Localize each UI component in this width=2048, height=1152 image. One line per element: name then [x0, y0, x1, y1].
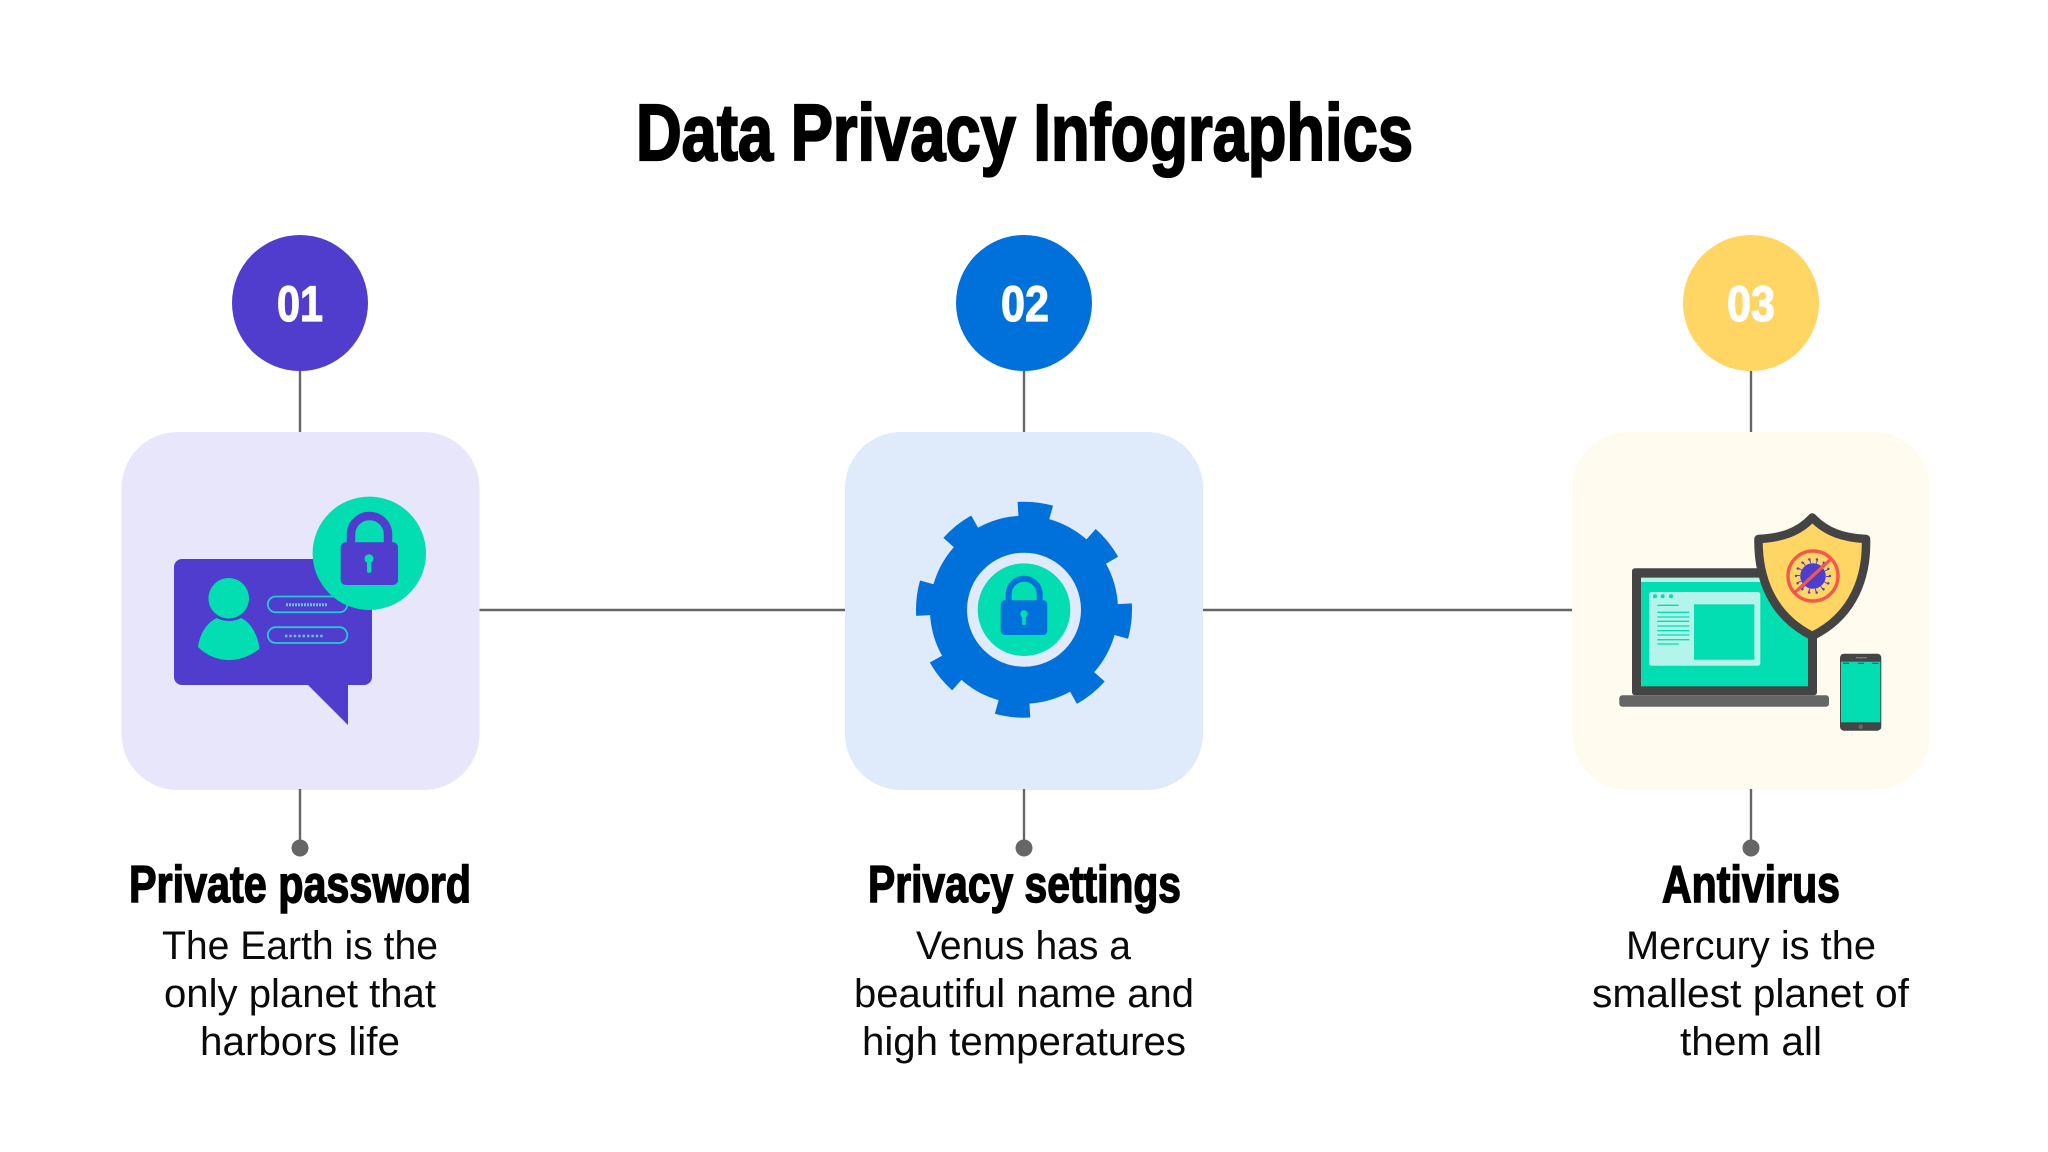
description 02: beautiful name and: [854, 972, 1194, 1016]
icon: profile speech bubble with padlock: [174, 497, 426, 725]
panel: privacy settings: [845, 235, 1203, 1064]
panel: antivirus: [1572, 235, 1930, 1064]
description 03: [1592, 924, 1910, 1064]
title: Data Privacy Infographics: [636, 88, 1413, 177]
description 01: [162, 924, 438, 1064]
heading 03: Antivirus: [1662, 856, 1840, 914]
number badge 03: 03: [1727, 276, 1775, 332]
bottom connector with dot 02: [1016, 789, 1032, 856]
number badge 02: [956, 235, 1092, 371]
number badge 03: [1683, 235, 1819, 371]
description 02: Venus has a: [916, 924, 1132, 968]
icon: laptop, phone and antivirus shield: [1619, 518, 1881, 731]
connector: card 1 to card 2: [479, 609, 845, 611]
description 03: smallest planet of: [1592, 972, 1910, 1016]
description 01: harbors life: [200, 1020, 400, 1064]
description 02: [854, 924, 1194, 1064]
top connector 03: [1750, 371, 1752, 432]
description 03: them all: [1680, 1020, 1822, 1064]
description 03: Mercury is the: [1626, 924, 1876, 968]
number badge 01: [232, 235, 368, 371]
panel: private password: [122, 235, 480, 1064]
heading 01: Private password: [129, 856, 471, 914]
bottom connector with dot 03: [1742, 789, 1760, 856]
description 01: only planet that: [164, 972, 436, 1016]
number badge 01: 01: [277, 276, 323, 332]
top connector 01: [299, 371, 301, 432]
card background 03: [1572, 432, 1930, 790]
number badge 02: 02: [1001, 276, 1049, 332]
top connector 02: [1023, 371, 1025, 432]
icon: gear with padlock: [918, 504, 1130, 715]
card background 01: [122, 432, 480, 790]
heading 02: Privacy settings: [868, 856, 1181, 914]
card background 02: [845, 432, 1203, 790]
description 01: The Earth is the: [162, 924, 438, 968]
connector: card 2 to card 3: [1202, 609, 1573, 611]
description 02: high temperatures: [862, 1020, 1186, 1064]
bottom connector with dot 01: [292, 789, 308, 856]
